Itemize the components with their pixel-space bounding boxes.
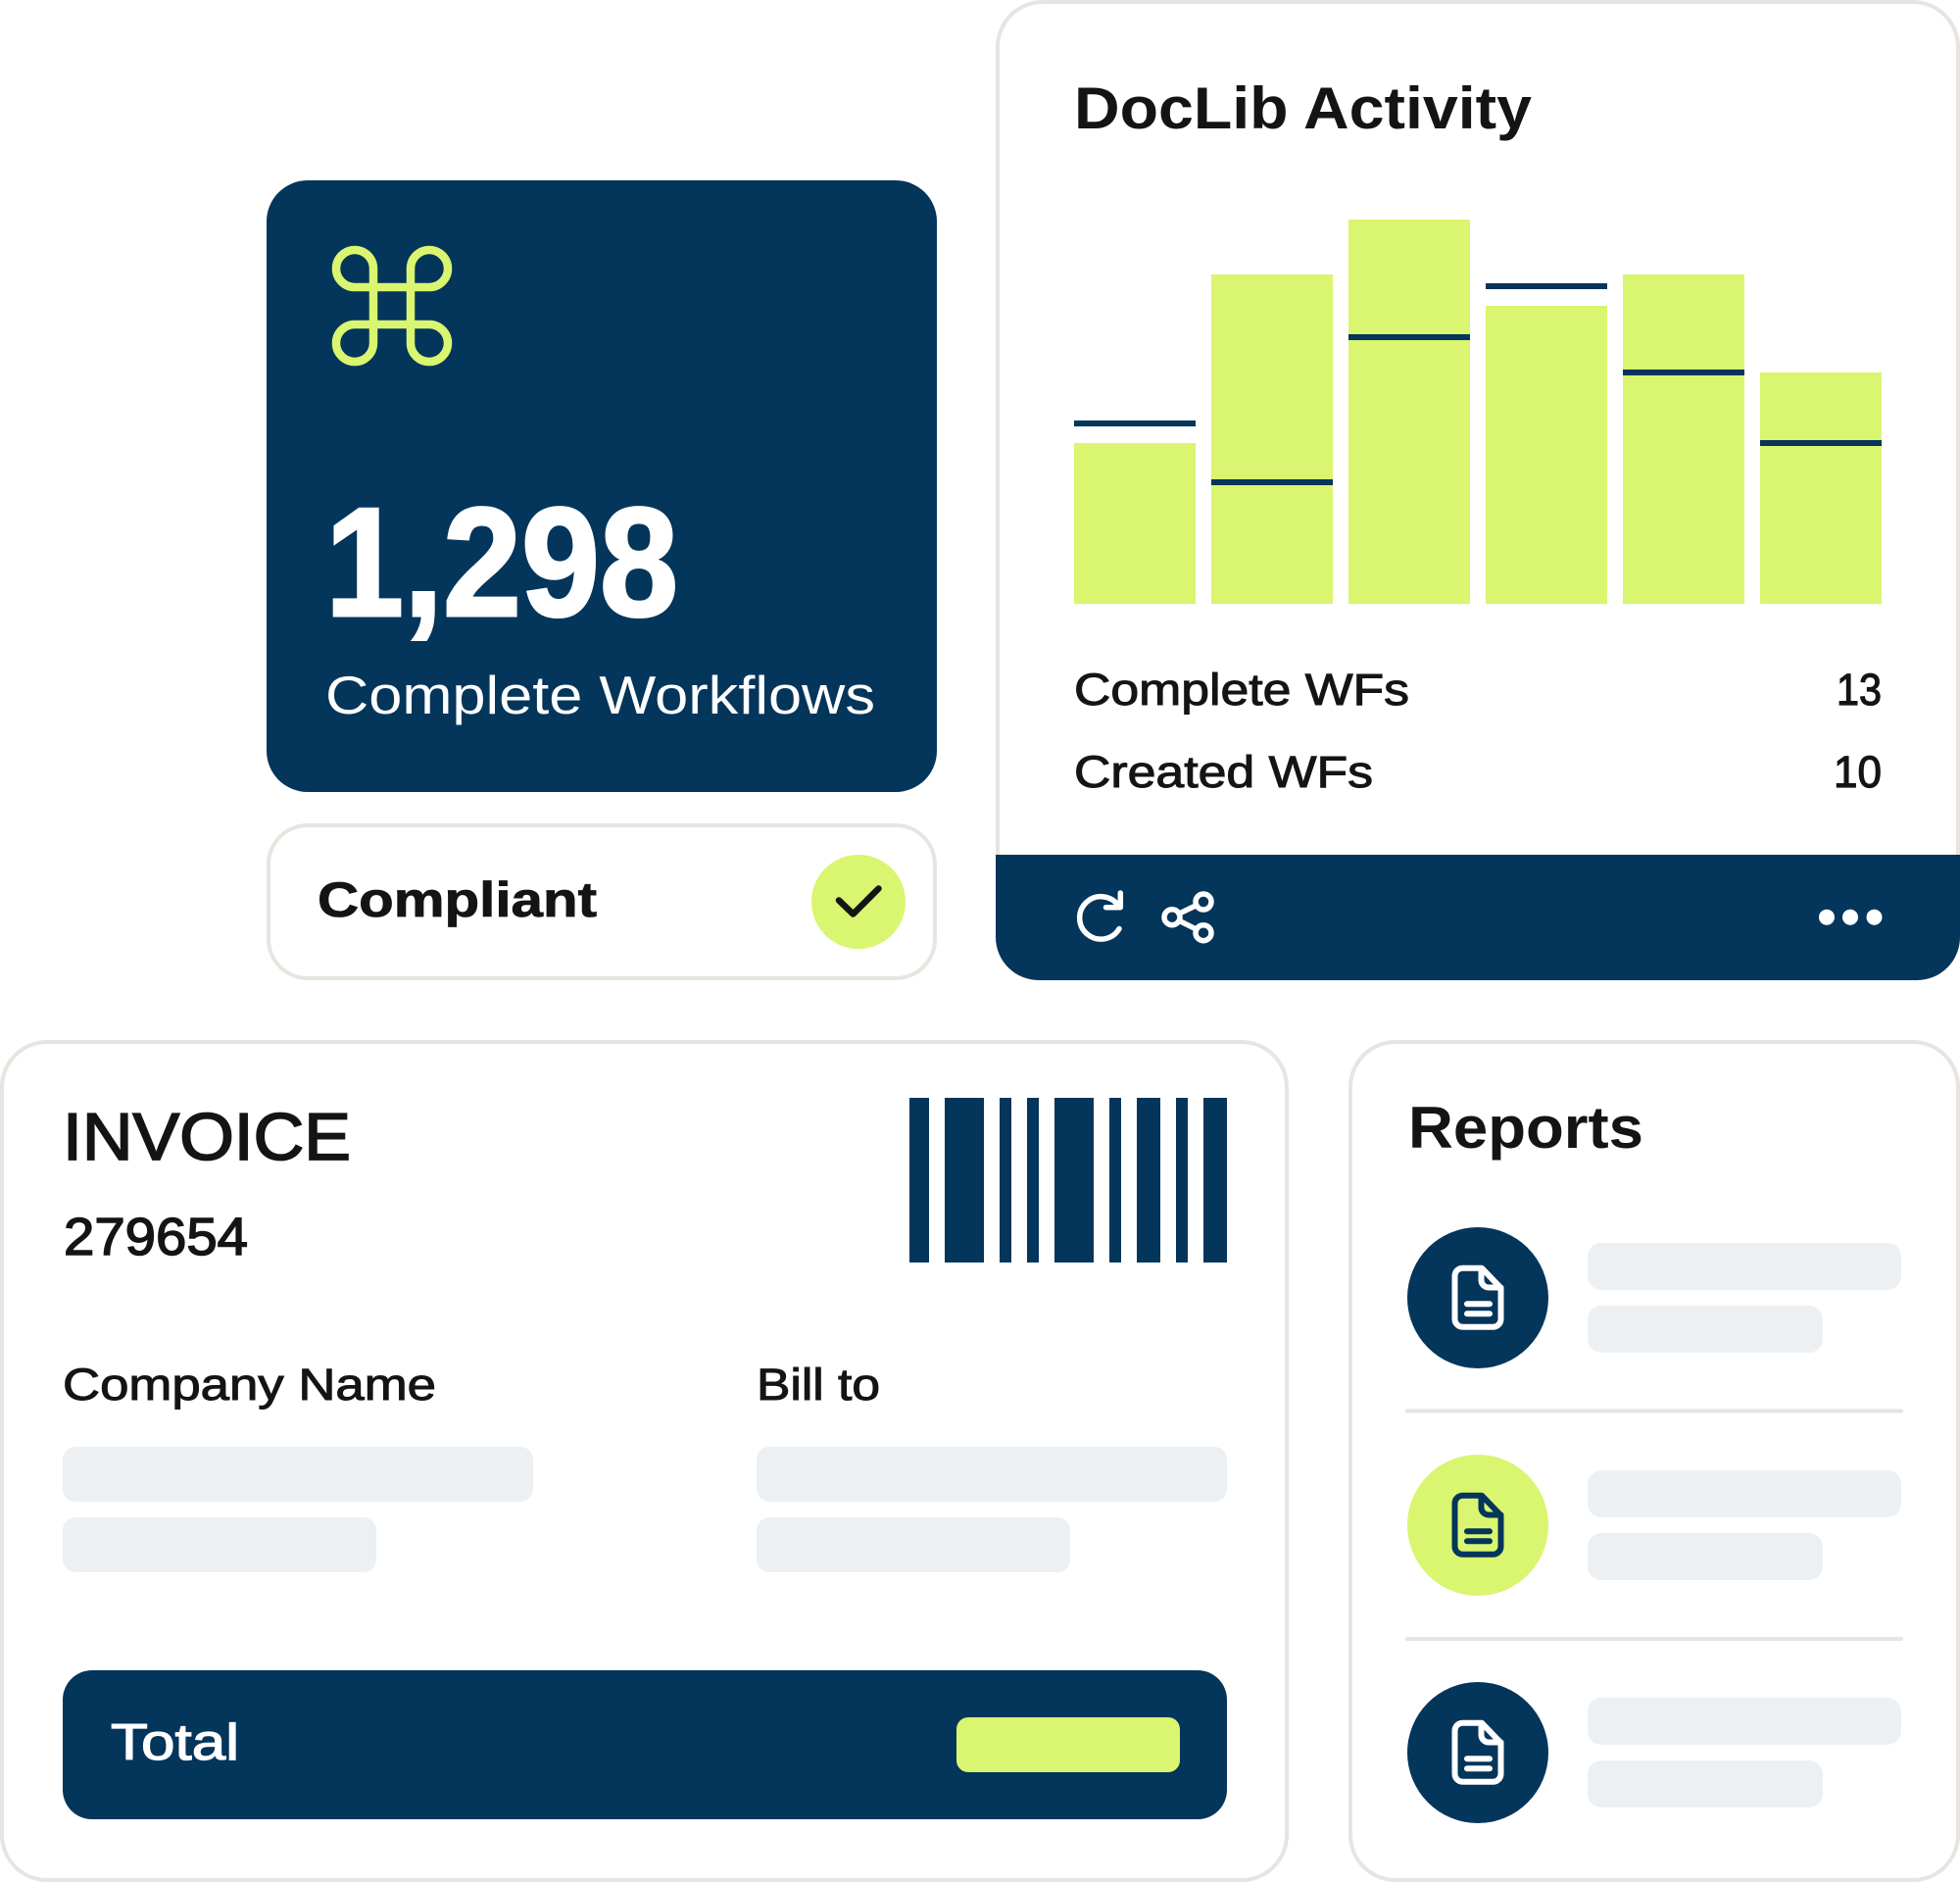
- panel: invoice: [2, 1042, 1287, 1880]
- company name field: [63, 1360, 533, 1572]
- icon: check circle: [811, 855, 906, 949]
- legend row: complete WFs: 13: [1837, 665, 1882, 715]
- panel: reports: [1350, 1042, 1958, 1880]
- stat label: Complete Workflows: [325, 665, 875, 725]
- barcode: [909, 1098, 1227, 1263]
- bar chart: [1074, 220, 1882, 604]
- bill to field: Bill to: [757, 1360, 880, 1410]
- legend row: complete WFs: Complete WFs: [1074, 665, 1409, 715]
- bill to field: [757, 1360, 1227, 1572]
- compliant label: Compliant: [318, 872, 597, 927]
- total bar: Total: [111, 1714, 239, 1771]
- footer bar: [996, 855, 1960, 980]
- invoice number: 279654: [64, 1208, 248, 1266]
- legend row: created WFs: [1074, 747, 1882, 797]
- heading: Reports: Reports: [1408, 1095, 1643, 1161]
- panel: compliant badge: [269, 825, 935, 978]
- company name field: Company Name: [63, 1360, 436, 1410]
- panel: DocLib activity: [996, 2, 1960, 980]
- icon: share: [1164, 894, 1211, 941]
- invoice title: INVOICE: [63, 1100, 351, 1174]
- total bar: [63, 1670, 1227, 1819]
- legend row: complete WFs: [1074, 665, 1882, 715]
- stat value: 1,298: [325, 476, 678, 649]
- report row 2: [1407, 1455, 1901, 1596]
- legend row: created WFs: Created WFs: [1074, 747, 1373, 797]
- report row 3: [1407, 1682, 1901, 1823]
- icon: refresh: [1080, 893, 1120, 939]
- panel: complete workflows stat card: [267, 180, 937, 792]
- report row 1: [1407, 1227, 1901, 1368]
- heading: DocLib Activity: DocLib Activity: [1074, 75, 1533, 141]
- legend row: created WFs: 10: [1834, 747, 1882, 797]
- icon: more dots: [1819, 910, 1882, 925]
- icon: command symbol: [336, 250, 448, 362]
